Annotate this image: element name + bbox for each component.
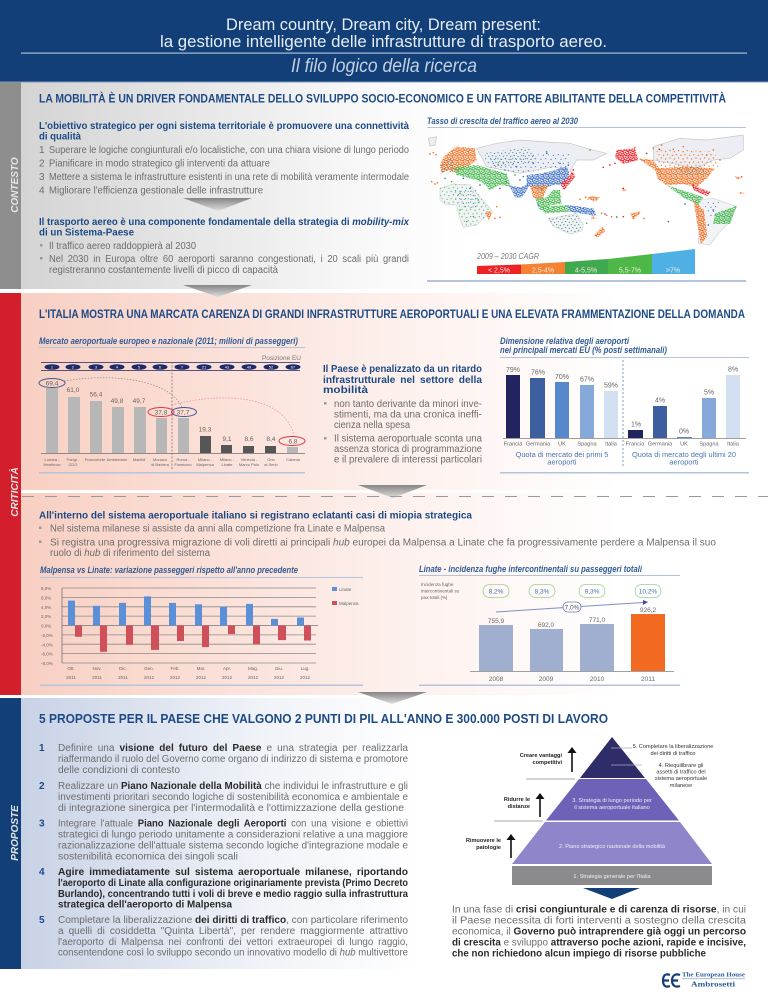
bar chart: quote di mercato: Francia xyxy=(504,442,523,448)
text block: connettivita xyxy=(39,120,409,196)
text block: conclusione: che non richiedono alcun impiego di risorse pubbliche xyxy=(452,948,706,960)
proposal 1: delle condizioni di contesto xyxy=(58,765,180,776)
legend: CAGR scale: < 2,5% xyxy=(488,268,510,274)
bar chart: quote di mercato: aeroporti xyxy=(669,458,699,466)
bar chart: quote di mercato: 1% xyxy=(631,422,641,428)
text block: conclusione: economica, il Governo può intraprendere già oggi un percorso xyxy=(452,926,746,938)
bar chart: linate: 9,3% xyxy=(585,588,600,596)
arrow: down xyxy=(358,692,427,704)
bar chart: passeggeri aeroporti: Roma - xyxy=(176,457,190,462)
bar chart: passeggeri aeroporti: Milano - xyxy=(220,457,235,462)
proposal 3: razionalizzazione dell'attuale sistema secondo logiche d'integrazione modale e xyxy=(58,840,408,852)
bar chart: variazione passeggeri: Malpensa xyxy=(339,601,359,606)
bar chart: passeggeri aeroporti: Milano - xyxy=(198,457,213,462)
bar chart: linate: 771,0 xyxy=(589,617,606,624)
bar chart: passeggeri aeroporti: Parigi - xyxy=(67,457,80,462)
text block: conclusione: di crescita e sviluppo attraverso poche azioni, rapide e incisive, xyxy=(452,938,746,948)
bar chart: quote di mercato: 4% xyxy=(655,398,665,404)
bar chart: variazione passeggeri: 2,0% xyxy=(41,614,51,619)
bar chart: quote di mercato: UK xyxy=(680,442,688,448)
bar chart: passeggeri aeroporti: Orio xyxy=(267,457,276,462)
chart title: malpensa vs linate: Malpensa vs Linate: variazione passeggeri rispetto all'anno precedente xyxy=(40,565,298,575)
bar chart: variazione passeggeri: Giu. xyxy=(275,666,283,671)
world map of traffic growth xyxy=(428,135,745,245)
text block: ritardo infrastrutturale: stimenti, ma da una cronica ineffi- xyxy=(334,410,482,420)
bar chart: passeggeri aeroporti: 37,7 xyxy=(177,410,190,416)
text block: ritardo infrastrutturale: Il sistema aeroportuale sconta una xyxy=(334,434,482,444)
proposal 4: Agire immediatamente sul sistema aeroportuale milanese, riportando xyxy=(58,867,408,878)
side label: contesto: CONTESTO xyxy=(10,157,21,213)
text block: ritardo infrastrutturale: non tanto derivante da minori inve- xyxy=(334,399,482,410)
bar chart: linate: 10,2% xyxy=(639,588,657,596)
pyramid diagram: patologie xyxy=(476,845,501,851)
text block: connettivita: L'obiettivo strategico per ogni sistema territoriale è promuovere una connettività xyxy=(39,120,409,132)
bar chart: variazione passeggeri: Linate xyxy=(339,587,352,592)
bar chart: variazione passeggeri: 2011 xyxy=(92,675,102,680)
proposal 1 xyxy=(39,743,408,776)
bar chart: variazione passeggeri: 8,0% xyxy=(41,586,51,591)
proposal 3: Integrare l'attuale Piano Nazionale degli Aeroporti con una visione e obiettivi xyxy=(58,818,408,830)
proposal 3: sostenibilità economica dei singoli scali xyxy=(58,852,238,862)
bar chart: passeggeri aeroporti: 6 xyxy=(159,364,162,370)
bar chart: variazione passeggeri: -8,0% xyxy=(41,661,53,666)
text block: ritardo infrastrutturale xyxy=(323,363,482,466)
bar chart: quote di mercato: Spagna xyxy=(577,442,598,448)
bar chart: variazione passeggeri: Gen. xyxy=(144,666,154,671)
bar chart: passeggeri aeroporti: Heathrow xyxy=(43,462,61,467)
bar chart: variazione passeggeri: 2012 xyxy=(170,675,181,680)
legend: CAGR scale: 2,5-4% xyxy=(532,268,554,274)
main title: Dream country, Dream city, Dream present: xyxy=(226,15,541,34)
bar chart: passeggeri aeroporti: 43 xyxy=(225,364,230,370)
pyramid diagram: Creare vantaggi xyxy=(520,753,562,759)
pyramid labels: 2. Piano strategico nazionale della mobilità xyxy=(559,844,666,850)
bar chart: variazione passeggeri: Feb. xyxy=(170,666,180,671)
text block: connettivita: Mettere a sistema le infrastrutture esistenti in una rete di mobilità veramente intermodale xyxy=(49,172,409,183)
pyramid diagram xyxy=(466,737,713,885)
pyramid diagram: milanese xyxy=(670,783,692,789)
text block: sistema milanese: ruolo di hub di riferimento del sistema xyxy=(50,548,210,559)
subtitle: Il filo logico della ricerca xyxy=(291,56,477,77)
text block: mobility-mix: Il traffico aereo raddoppierà al 2030 xyxy=(49,241,196,252)
bar chart: linate: intercontinentali su xyxy=(421,588,460,594)
bar chart: passeggeri aeroporti: 9,1 xyxy=(222,436,232,443)
proposal 4: strategica dell'aeroporto di Malpensa xyxy=(58,900,232,910)
arrow: conclusion xyxy=(583,888,640,899)
bar chart: passeggeri aeroporti: 6,8 xyxy=(288,438,298,446)
bar chart: linate: 2008 xyxy=(489,676,504,683)
bar chart: variazione passeggeri: 2012 xyxy=(196,675,207,680)
legend: CAGR scale: 4-5,5% xyxy=(575,268,597,274)
logo: the european house ambrosetti xyxy=(663,972,745,988)
text block: connettivita: 3 xyxy=(39,172,45,183)
side label: proposte: PROPOSTE xyxy=(10,805,21,861)
bar chart: quote di mercato: 5% xyxy=(704,390,714,396)
bar chart: passeggeri aeroporti: 5 xyxy=(138,364,141,370)
pyramid labels xyxy=(559,798,666,880)
text block: connettivita: 4 xyxy=(39,186,45,196)
text block: ritardo infrastrutturale: mobilità xyxy=(323,384,368,396)
side label: criticita: CRITICITÀ xyxy=(8,467,21,517)
bar chart: variazione passeggeri: 2012 xyxy=(144,675,155,680)
bar chart: passeggeri aeroporti: 4 xyxy=(116,364,119,370)
bar chart: variazione passeggeri: 4,0% xyxy=(41,605,51,610)
text block: mobility-mix: di un Sistema-Paese xyxy=(39,226,134,238)
bar chart: quote di mercato: 70% xyxy=(555,374,569,381)
pyramid diagram: dei diritti di traffico xyxy=(651,751,695,757)
panel: criticita xyxy=(0,285,768,695)
bar chart: variazione passeggeri: 2012 xyxy=(274,675,285,680)
bar chart: variazione passeggeri: 2011 xyxy=(66,675,76,680)
bar chart: passeggeri aeroporti: Linate xyxy=(222,462,233,467)
bar chart: quote di mercato: Germania xyxy=(526,442,551,448)
bar chart: passeggeri aeroporti: Marco Polo xyxy=(239,462,260,467)
bar chart: variazione passeggeri: Apr. xyxy=(223,666,231,671)
bar chart: quote di mercato: 8% xyxy=(728,366,738,374)
bar chart: passeggeri aeroporti: 69,4 xyxy=(46,380,59,388)
pyramid diagram: Ridurre le xyxy=(504,797,530,803)
proposal 2 xyxy=(39,781,408,814)
text block: ritardo infrastrutturale: e il prevalere di interessi particolari xyxy=(334,454,482,466)
bar chart: passeggeri aeroporti: Londra - xyxy=(45,457,60,462)
chart title: dimensione relativa: Dimensione relativa degli aeroporti xyxy=(500,336,629,346)
chart title: dimensione relativa xyxy=(500,336,667,355)
legend: CAGR scale xyxy=(476,249,695,274)
proposal 3 xyxy=(39,818,408,862)
text block: ritardo infrastrutturale: cienza nella spesa xyxy=(334,420,410,431)
legend: CAGR scale: >7% xyxy=(666,268,680,274)
bar chart: passeggeri aeroporti: di Baviera xyxy=(151,462,170,467)
bar chart: variazione passeggeri: 6,0% xyxy=(41,596,51,600)
bar chart: quote di mercato: 79% xyxy=(506,367,520,374)
logo: the european house ambrosetti: Ambrosetti xyxy=(691,980,735,988)
bar chart: passeggeri aeroporti: 1 xyxy=(51,364,54,370)
bar chart: quote di mercato: Germania xyxy=(648,442,673,448)
bar chart: variazione passeggeri: -2,0% xyxy=(41,633,53,638)
bar chart: variazione passeggeri: 2012 xyxy=(222,675,233,680)
bar chart: passeggeri aeroporti: Fiumicino xyxy=(174,462,192,467)
bar chart: passeggeri aeroporti: Monaco xyxy=(153,457,168,462)
text block: ritardo infrastrutturale: assenza storica di programmazione xyxy=(334,444,482,455)
proposal 3: strategici di lungo periodo unitamente a considerazioni relative a una maggiore xyxy=(58,830,408,840)
bar chart: linate: 755,9 xyxy=(488,618,505,625)
text block: sistema milanese: Si registra una progressiva migrazione di voli diretti ai principali hub europei da Malpensa a Linate che fa progressivamente perdere a Malpensa il suo xyxy=(50,538,716,548)
proposal 4: Burlando), concentrando tutti i voli di breve e medio raggio sulla infrastruttura xyxy=(58,889,408,900)
bar chart: passeggeri aeroporti: 49,7 xyxy=(133,398,146,405)
bar chart: passeggeri aeroporti: 19,3 xyxy=(199,426,212,434)
pyramid labels: 3. Strategia di lungo periodo per xyxy=(572,798,652,804)
text block: mobility-mix: registreranno costantemente livelli di picco di capacità xyxy=(49,265,278,276)
proposal 5 xyxy=(39,915,408,958)
pyramid diagram: assetti di traffico del xyxy=(656,770,706,776)
bar chart: linate: 8,2% xyxy=(489,588,504,596)
bar chart: passeggeri aeroporti: 7 xyxy=(181,364,184,370)
bar chart: variazione passeggeri: 2011 xyxy=(118,675,128,680)
panel: contesto xyxy=(0,82,768,289)
bar chart: passeggeri aeroporti: CDG xyxy=(69,462,77,467)
bar chart: quote di mercato: aeroporti xyxy=(547,458,577,466)
pyramid diagram: 4. Riequilibrare gli xyxy=(659,763,703,769)
bar chart: passeggeri aeroporti xyxy=(39,355,305,470)
text block: ritardo infrastrutturale: infrastrutturale nel settore della xyxy=(323,374,482,386)
bar chart: passeggeri aeroporti: Francoforte xyxy=(85,457,106,462)
bar chart: variazione passeggeri: Lug. xyxy=(301,666,309,671)
bar chart: passeggeri aeroporti: 67 xyxy=(291,364,296,370)
bar chart: passeggeri aeroporti: 8,4 xyxy=(266,436,276,443)
proposal 4: l'aeroporto di Linate alla configurazione originariamente prevista (Primo Decreto xyxy=(58,878,408,889)
arrow: down xyxy=(358,485,427,498)
proposal 4 xyxy=(39,867,408,910)
bar chart: linate: 8,3% xyxy=(535,588,550,596)
pyramid diagram: competitivi xyxy=(532,760,562,766)
arrow: down xyxy=(183,198,252,211)
bar chart: linate: pax totali [%] xyxy=(421,595,447,600)
text block: mobility-mix: Nel 2030 in Europa oltre 60 aeroporti saranno congestionati, i 20 scali più grandi xyxy=(49,254,409,265)
bar chart: quote di mercato: Italia xyxy=(605,442,618,448)
heading: 5 proposte: 5 PROPOSTE PER IL PAESE CHE VALGONO 2 PUNTI DI PIL ALL'ANNO E 300.000 POSTI DI LAVORO xyxy=(39,711,608,726)
pyramid labels: 1. Strategia generale per l'Italia xyxy=(573,874,652,880)
bar chart: passeggeri aeroporti: Malpensa xyxy=(196,462,214,467)
heading: miopia strategica: All'interno del sistema aeroportuale italiano si registrano eclatanti casi di miopia strategica xyxy=(39,510,472,522)
proposal 2: Realizzare un Piano Nazionale della Mobilità che individui le infrastrutture e gli xyxy=(58,781,408,792)
bar chart: variazione passeggeri: 2012 xyxy=(248,675,259,680)
bar chart: linate: 2010 xyxy=(590,676,605,683)
bar chart: passeggeri aeroporti: 49 xyxy=(247,364,252,370)
bar chart: variazione passeggeri: -4,0% xyxy=(41,642,53,647)
text block: connettivita: 2 xyxy=(39,158,45,170)
bar chart: variazione passeggeri xyxy=(41,586,359,680)
bar chart: variazione passeggeri: Dic. xyxy=(119,666,127,671)
text block: connettivita: Superare le logiche congiunturali e/o localistiche, con una chiara visione di lungo periodo xyxy=(49,145,409,156)
chart title: linate fughe intercontinentali: Linate - incidenza fughe intercontinentali su passeggeri totali xyxy=(419,564,642,574)
bar chart: linate: Incidenza fughe xyxy=(421,582,454,587)
bar chart: quote di mercato xyxy=(503,360,746,466)
bar chart: linate: 2011 xyxy=(641,676,655,683)
proposal 5: l'aeroporto di Malpensa nei confronti dei vettori extraeuropei di lungo raggio, xyxy=(58,937,408,948)
main title: la gestione intelligente delle infrastrutture di trasporto aereo. xyxy=(160,32,607,51)
proposal 2: di integrazione sinergica per l'intermodalità e l'ottimizzazione della gestione xyxy=(58,803,404,814)
proposal 1: riaffermando il ruolo del Governo come organo di indirizzo di sistema e promotore xyxy=(58,754,408,765)
text block: conclusione xyxy=(452,904,746,960)
bar chart: quote di mercato: Francia xyxy=(626,442,645,448)
pyramid diagram: distanze xyxy=(508,804,530,810)
bar chart: passeggeri aeroporti: 49,8 xyxy=(111,398,124,405)
pyramid diagram: sistema aeroportuale xyxy=(655,776,707,782)
proposal 4: 4 xyxy=(39,867,45,878)
text block: ritardo infrastrutturale: Il Paese è penalizzato da un ritardo xyxy=(323,363,482,375)
bar chart: passeggeri aeroporti: Venezia - xyxy=(241,457,258,462)
bar chart: linate: 2009 xyxy=(539,676,554,683)
bar chart: quote di mercato: Quota di mercato dei primi 5 xyxy=(516,450,608,459)
bar chart: passeggeri aeroporti: 8,6 xyxy=(244,436,254,443)
proposal 2: investimenti prioritari secondo logiche di sostenibilità economica e ambientale e xyxy=(58,792,408,803)
text block: mobility-mix: Il trasporto aereo è una componente fondamentale della strategia di mobility-mix xyxy=(39,216,410,228)
proposal 2: 2 xyxy=(39,781,45,792)
header banner xyxy=(0,0,768,82)
bar chart: passeggeri aeroporti: Madrid xyxy=(133,457,145,462)
bar chart: quote di mercato: 76% xyxy=(531,370,545,376)
legend: CAGR scale: 2009 – 2030 CAGR xyxy=(476,252,539,261)
bar chart: passeggeri aeroporti: 2 xyxy=(72,364,75,370)
pyramid diagram: 5. Completare la liberalizzazione xyxy=(633,744,713,750)
bar chart: passeggeri aeroporti: 52 xyxy=(269,364,274,370)
bar chart: passeggeri aeroporti: 3 xyxy=(95,364,98,370)
bar chart: variazione passeggeri: Nov. xyxy=(93,666,101,671)
bar chart: passeggeri aeroporti: 56,4 xyxy=(90,392,103,398)
legend: CAGR scale: 5,5-7% xyxy=(619,268,641,274)
proposal 3: 3 xyxy=(39,818,45,830)
bar chart: quote di mercato: Spagna xyxy=(699,442,720,448)
bar chart: quote di mercato: 0% xyxy=(679,428,689,436)
bar chart: linate xyxy=(421,582,674,683)
chart title: mercato aeroportuale: Mercato aeroportuale europeo e nazionale (2011; milioni di passeggeri) xyxy=(39,336,298,346)
bar chart: passeggeri aeroporti: Amsterdam xyxy=(107,457,128,462)
bar chart: quote di mercato: 59% xyxy=(604,382,618,390)
main title xyxy=(160,15,607,51)
text block: connettivita: Pianificare in modo strategico gli interventi da attuare xyxy=(49,158,270,170)
text block: connettivita: Migliorare l'efficienza gestionale delle infrastrutture xyxy=(49,186,263,196)
text block: connettivita: di qualità xyxy=(39,130,81,142)
bar chart: variazione passeggeri: Mar. xyxy=(197,666,205,671)
text block: conclusione: In una fase di crisi congiunturale e di carenza di risorse , in cui xyxy=(452,904,746,916)
text block: sistema milanese: Nel sistema milanese si assiste da anni alla competizione fra Linate e Malpensa xyxy=(50,524,385,534)
bar chart: linate: 692,0 xyxy=(538,622,555,629)
bar chart: variazione passeggeri: Ott. xyxy=(67,666,75,671)
bar chart: variazione passeggeri: -6,0% xyxy=(41,652,53,657)
bar chart: quote di mercato: Quota di mercato degli ultimi 20 xyxy=(632,450,736,459)
bar chart: passeggeri aeroporti: al Serio xyxy=(264,462,279,467)
bar chart: quote di mercato: UK xyxy=(558,442,566,448)
bar chart: passeggeri aeroporti: Catania xyxy=(286,457,301,462)
bar chart: passeggeri aeroporti: Posizione EU xyxy=(262,355,301,362)
text block: connettivita: 1 xyxy=(39,145,45,156)
bar chart: variazione passeggeri: 2012 xyxy=(300,675,311,680)
proposal 1: Definire una visione del futuro del Paese e una strategia per realizzarla xyxy=(58,743,408,754)
bar chart: passeggeri aeroporti: 21 xyxy=(202,364,207,370)
text block: mobility-mix xyxy=(39,216,410,276)
pyramid labels: il sistema aeroportuale italiano xyxy=(574,805,650,811)
chart title: dimensione relativa: nei principali mercati EU (% posti settimanali) xyxy=(500,345,667,355)
proposal 5: 5 xyxy=(39,915,45,926)
arrow: down xyxy=(183,285,252,297)
bar chart: passeggeri aeroporti: 61,0 xyxy=(67,387,80,394)
bar chart: variazione passeggeri: 0,0% xyxy=(41,624,51,628)
text block: sistema milanese xyxy=(39,524,716,559)
proposal 5: Completare la liberalizzazione dei diritti di traffico, con particolare riferimento xyxy=(58,915,408,926)
bar chart: passeggeri aeroporti: 37,8 xyxy=(155,410,168,416)
proposal 5: consentendone così lo sviluppo secondo un innovativo modello di hub multivettore xyxy=(58,948,408,958)
panel: proposte xyxy=(0,692,608,969)
pyramid diagram: Rimuovere le xyxy=(466,838,501,844)
chart title: tasso di crescita: Tasso di crescita del traffico aereo al 2030 xyxy=(427,116,578,126)
text block: conclusione: il Paese necessita di forti interventi a sostegno della crescita xyxy=(452,916,746,926)
bar chart: linate: 926,2 xyxy=(640,607,657,614)
logo: the european house ambrosetti: The European House xyxy=(682,972,745,978)
proposal 5: a quelli di cosiddetta "Quinta Libertà", per rendere maggiormente attrattivo xyxy=(58,926,408,937)
proposal 1: 1 xyxy=(39,743,45,754)
bar chart: linate: 7,0% xyxy=(565,604,580,612)
bar chart: quote di mercato: Italia xyxy=(727,442,740,448)
bar chart: variazione passeggeri: Mag. xyxy=(248,666,258,671)
bar chart: quote di mercato: 67% xyxy=(580,376,594,384)
